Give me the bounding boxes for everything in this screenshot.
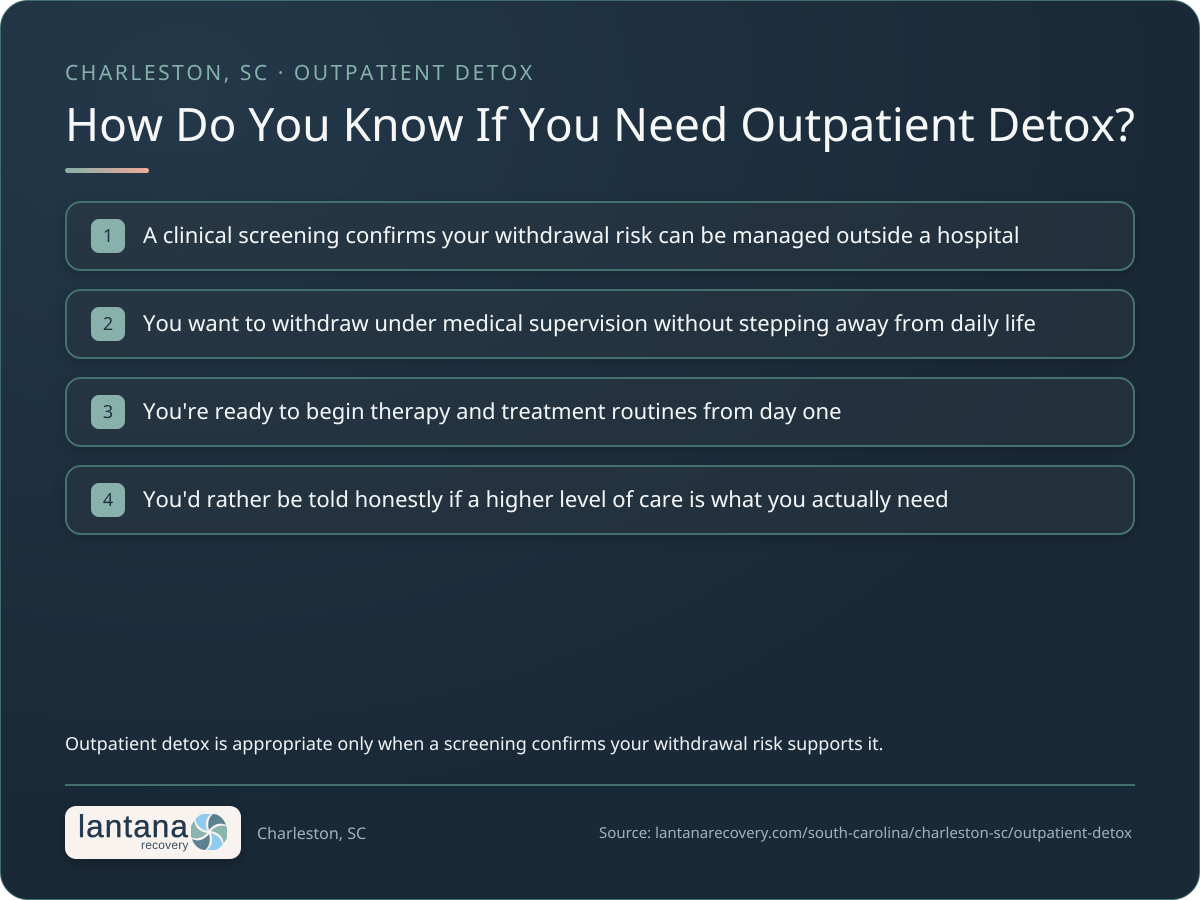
title: How Do You Know If You Need Outpatient Detox?	[65, 93, 1135, 155]
eyebrow: CHARLESTON, SC · OUTPATIENT DETOX	[65, 59, 535, 87]
item 1	[65, 201, 1135, 271]
item 2 text: You want to withdraw under medical supervision without stepping away from daily life	[143, 308, 1036, 338]
logo subtext: recovery	[141, 838, 189, 852]
logo wordmark: lantana	[78, 808, 189, 844]
item 3 text: You're ready to begin therapy and treatment routines from day one	[143, 396, 842, 426]
item 4 text: You'd rather be told honestly if a higher level of care is what you actually need	[143, 484, 949, 514]
badge 4	[91, 483, 125, 517]
disclaimer note: Outpatient detox is appropriate only when a screening confirms your withdrawal risk supports it.	[65, 732, 883, 756]
source: Source: lantanarecovery.com/south-carolina/charleston-sc/outpatient-detox	[599, 823, 1132, 843]
item 1 text: A clinical screening confirms your withdrawal risk can be managed outside a hospital	[143, 220, 1020, 250]
accent underline	[65, 168, 149, 173]
footer divider	[65, 784, 1135, 786]
item 4	[65, 465, 1135, 535]
item 2	[65, 289, 1135, 359]
badge 2	[91, 307, 125, 341]
item 3	[65, 377, 1135, 447]
icon: pinwheel	[191, 814, 227, 850]
badge 1: 1	[103, 224, 113, 248]
badge 3	[91, 395, 125, 429]
badge 1	[91, 219, 125, 253]
badge 2: 2	[103, 312, 113, 336]
logo badge	[65, 806, 241, 859]
badge 4: 4	[103, 488, 113, 512]
badge 3: 3	[103, 400, 113, 424]
footer location: Charleston, SC	[257, 822, 366, 844]
